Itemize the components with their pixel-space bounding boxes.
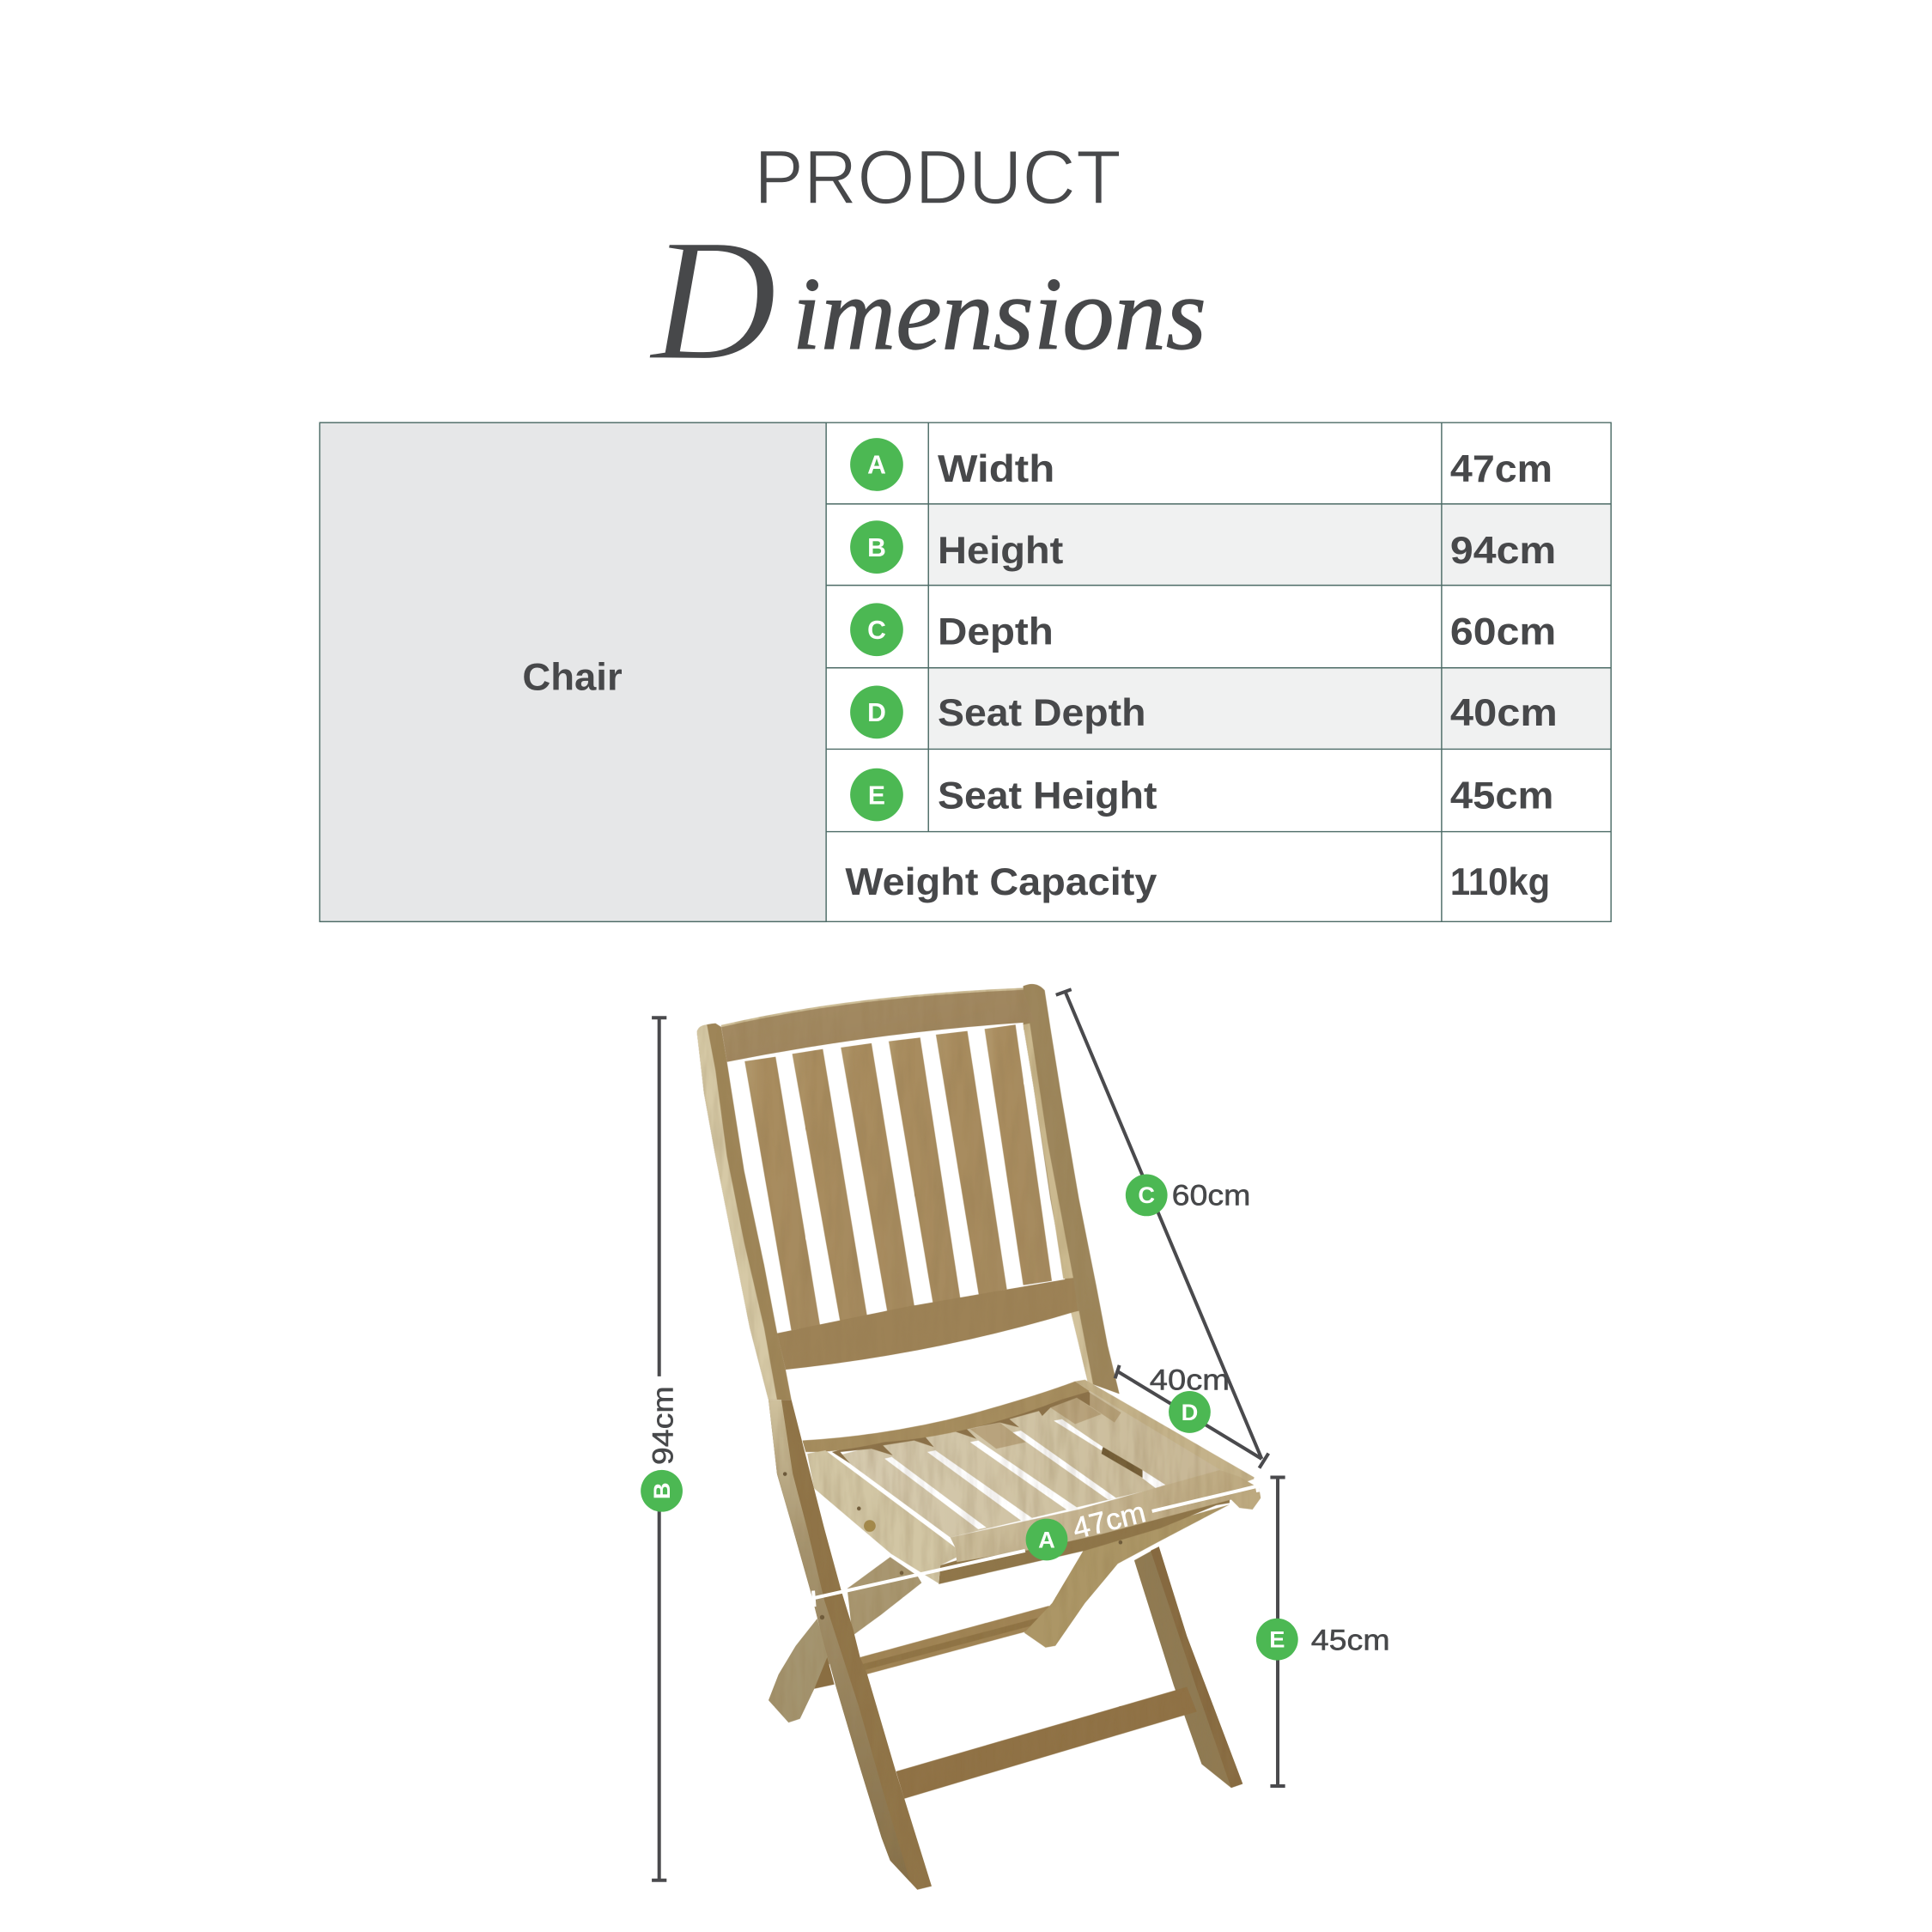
measurement D: seat depth: 40cm: [1150, 1364, 1230, 1397]
seat gaps: [884, 1419, 1165, 1529]
seat back rail: [802, 1382, 1090, 1452]
row: depth: [850, 603, 1556, 656]
measurement A: width: 47cm: [1069, 1496, 1149, 1546]
measurement E: seat height: E: [1269, 1626, 1285, 1653]
chair backrest: [697, 984, 1120, 1400]
seat under frame: [939, 1498, 1230, 1584]
heading: Dimensions: imensions: [793, 258, 1206, 372]
measurement C: depth: 60cm: [1172, 1179, 1250, 1212]
row: width: A: [867, 452, 886, 480]
row: seat height: [850, 769, 1553, 821]
lower back rail: [777, 1278, 1078, 1370]
row: seat height: Seat Height: [938, 775, 1157, 817]
row: depth: Depth: [938, 611, 1054, 653]
row: height: B: [867, 534, 886, 562]
hardware bolts: [783, 1472, 1122, 1619]
row: height: 94cm: [1450, 530, 1556, 572]
measurement B: height: B: [648, 1482, 675, 1499]
row: width: Width: [938, 448, 1054, 490]
shaded rows: [928, 504, 1612, 749]
row: width: [850, 438, 1552, 491]
chair legs behind seat: [769, 1400, 1054, 1890]
left seat rail: [807, 1450, 957, 1583]
heading: PRODUCT: PRODUCT: [754, 134, 1121, 220]
folding support left upper: [848, 1557, 921, 1634]
measurement B: height: 94cm: [647, 1386, 679, 1465]
panel: chair label cell: Chair: [522, 657, 623, 699]
measurement E: seat height: 45cm: [1311, 1624, 1390, 1656]
right seat rail: [1075, 1380, 1256, 1483]
right stile: [1024, 984, 1120, 1394]
measurement A: width: A: [1038, 1526, 1055, 1552]
folding support left lower: [769, 1619, 830, 1722]
left stile: [697, 1024, 792, 1400]
rear right leg: [1134, 1546, 1242, 1788]
row: weight capacity: [845, 861, 1550, 903]
chair illustration: [697, 984, 1261, 1890]
back slats: [744, 1024, 1052, 1330]
row: seat depth: [850, 686, 1558, 738]
folding support right: [1024, 1504, 1230, 1648]
measurement D: seat depth: D: [1182, 1399, 1198, 1425]
measurement C: depth: C: [1138, 1182, 1155, 1208]
row: seat depth: 40cm: [1450, 692, 1558, 734]
row: height: Height: [938, 530, 1064, 572]
row: height: [850, 520, 1556, 574]
slat end shadows: [832, 1386, 1090, 1463]
row: seat depth: D: [867, 699, 886, 727]
panel: chair label cell: [319, 422, 826, 921]
lower cross rail: [896, 1687, 1197, 1799]
row: seat depth: Seat Depth: [938, 692, 1146, 734]
row: seat height: E: [868, 781, 885, 810]
measurement E: seat height: [1256, 1478, 1390, 1786]
seat surface: [839, 1391, 1226, 1537]
chair seat and right legs: [783, 1380, 1261, 1799]
measurement C: depth: [1056, 989, 1268, 1468]
row: depth: 60cm: [1450, 611, 1556, 653]
measurement B: height: [641, 1018, 683, 1880]
upper cross rail: [860, 1606, 1054, 1674]
top rail: [721, 989, 1035, 1062]
row: weight capacity: 110kg: [1450, 861, 1550, 903]
title: [648, 134, 1206, 398]
table grid: [826, 422, 1611, 921]
row: weight capacity: Weight Capacity: [845, 861, 1157, 903]
row: depth: C: [867, 617, 886, 645]
measurement D: seat depth: [1115, 1364, 1261, 1459]
seat shadow patches: [970, 1393, 1121, 1449]
measurement A: width: [813, 1478, 1258, 1607]
front seat rail: [951, 1470, 1261, 1562]
heading: Dimensions: D: [648, 204, 777, 398]
dimensions table: [319, 422, 1612, 921]
row: width: 47cm: [1450, 448, 1552, 490]
main left leg: [769, 1400, 932, 1890]
row: seat height: 45cm: [1450, 775, 1553, 817]
